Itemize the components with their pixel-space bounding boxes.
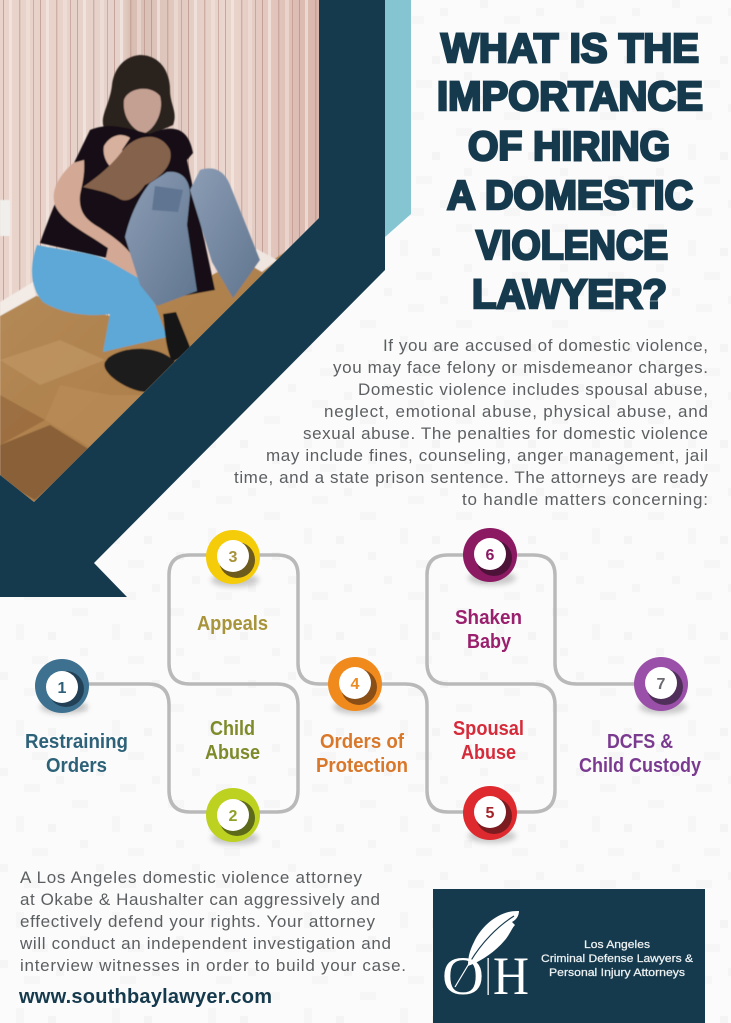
step 6: shaken baby: Shaken: [455, 607, 522, 629]
intro paragraph: neglect, emotional abuse, physical abuse, and: [324, 402, 708, 421]
step 2: child abuse: 2: [229, 808, 238, 825]
icon: quill feather: [455, 911, 519, 987]
step 4: orders of protection: Protection: [316, 755, 408, 777]
closing paragraph: interview witnesses in order to build your case.: [20, 956, 406, 975]
title: [437, 25, 703, 317]
step 3: appeals: Appeals: [197, 613, 268, 635]
step 7: dcfs and child custody: 7: [657, 676, 666, 693]
closing paragraph: at Okabe & Haushalter can aggressively and: [20, 890, 380, 909]
step 5: spousal abuse: Spousal: [453, 718, 524, 740]
logo caption: [541, 939, 694, 979]
step 5: spousal abuse: [453, 718, 524, 843]
woman: hand on child's head: [102, 134, 131, 166]
logo caption: Los Angeles: [584, 939, 651, 951]
title: OF HIRING: [468, 123, 670, 169]
light teal accent band: [385, 0, 411, 237]
step 7: dcfs and child custody: DCFS &: [607, 731, 673, 753]
closing paragraph: effectively defend your rights. Your attorney: [20, 912, 376, 931]
dark arrow band: [0, 0, 385, 597]
step 1: restraining orders: Restraining: [25, 731, 128, 753]
flow connector lines: [62, 555, 661, 812]
step 5: spousal abuse: 5: [486, 805, 495, 822]
closing paragraph: A Los Angeles domestic violence attorney: [20, 868, 362, 887]
title: IMPORTANCE: [437, 73, 703, 119]
step 4: orders of protection: [316, 657, 408, 777]
child: hair: [83, 137, 171, 200]
intro paragraph: [234, 336, 708, 509]
intro paragraph: sexual abuse. The penalties for domestic violence: [303, 424, 708, 443]
photo: mother holding child in a corner: [0, 0, 320, 520]
closing paragraph: [19, 868, 406, 975]
woman: hair: [103, 55, 175, 135]
website url: www.southbaylawyer.com: [18, 986, 272, 1008]
step 4: orders of protection: 4: [351, 676, 360, 693]
woman: right jeans leg: [190, 168, 260, 298]
step 2: child abuse: [205, 718, 260, 845]
logo lettermark: O: [442, 946, 484, 1006]
step 3: appeals: [197, 530, 268, 635]
intro paragraph: you may face felony or misdemeanor charges.: [333, 358, 708, 377]
title: WHAT IS THE: [441, 25, 699, 71]
intro paragraph: Domestic violence includes spousal abuse,: [358, 380, 708, 399]
step 6: shaken baby: Baby: [467, 631, 512, 653]
woman: black shirt: [40, 126, 215, 300]
intro paragraph: may include fines, counseling, anger management, jail: [266, 446, 708, 465]
logo lettermark: [442, 946, 529, 1006]
logo lettermark: H: [493, 946, 529, 1006]
step 2: child abuse: Abuse: [205, 742, 260, 764]
step 1: restraining orders: 1: [58, 680, 67, 697]
step 7: dcfs and child custody: Child Custody: [579, 755, 702, 777]
intro paragraph: to handle matters concerning:: [462, 490, 708, 509]
intro paragraph: If you are accused of domestic violence,: [383, 336, 708, 355]
woman: left jeans leg: [125, 172, 197, 306]
closing paragraph: will conduct an independent investigation and: [19, 934, 391, 953]
step 6: shaken baby: [455, 528, 522, 653]
logo panel: [433, 889, 705, 1023]
logo caption: Criminal Defense Lawyers &: [541, 953, 694, 965]
step 4: orders of protection: Orders of: [320, 731, 404, 753]
step 1: restraining orders: Orders: [46, 755, 107, 777]
step 5: spousal abuse: Abuse: [461, 742, 516, 764]
logo caption: Personal Injury Attorneys: [549, 967, 686, 979]
woman: socks: [163, 312, 192, 362]
title: LAWYER?: [472, 271, 667, 317]
woman: face: [124, 89, 161, 133]
woman: arm: [53, 159, 138, 278]
title: A DOMESTIC: [447, 172, 693, 218]
title: VIOLENCE: [476, 222, 668, 268]
step 1: restraining orders: [25, 659, 128, 777]
intro paragraph: time, and a state prison sentence. The attorneys are ready: [234, 468, 708, 487]
step 6: shaken baby: 6: [486, 547, 495, 564]
step 2: child abuse: Child: [210, 718, 255, 740]
step 7: dcfs and child custody: [579, 657, 702, 777]
step 3: appeals: 3: [229, 549, 238, 566]
woman: blue trousers: [32, 245, 167, 352]
